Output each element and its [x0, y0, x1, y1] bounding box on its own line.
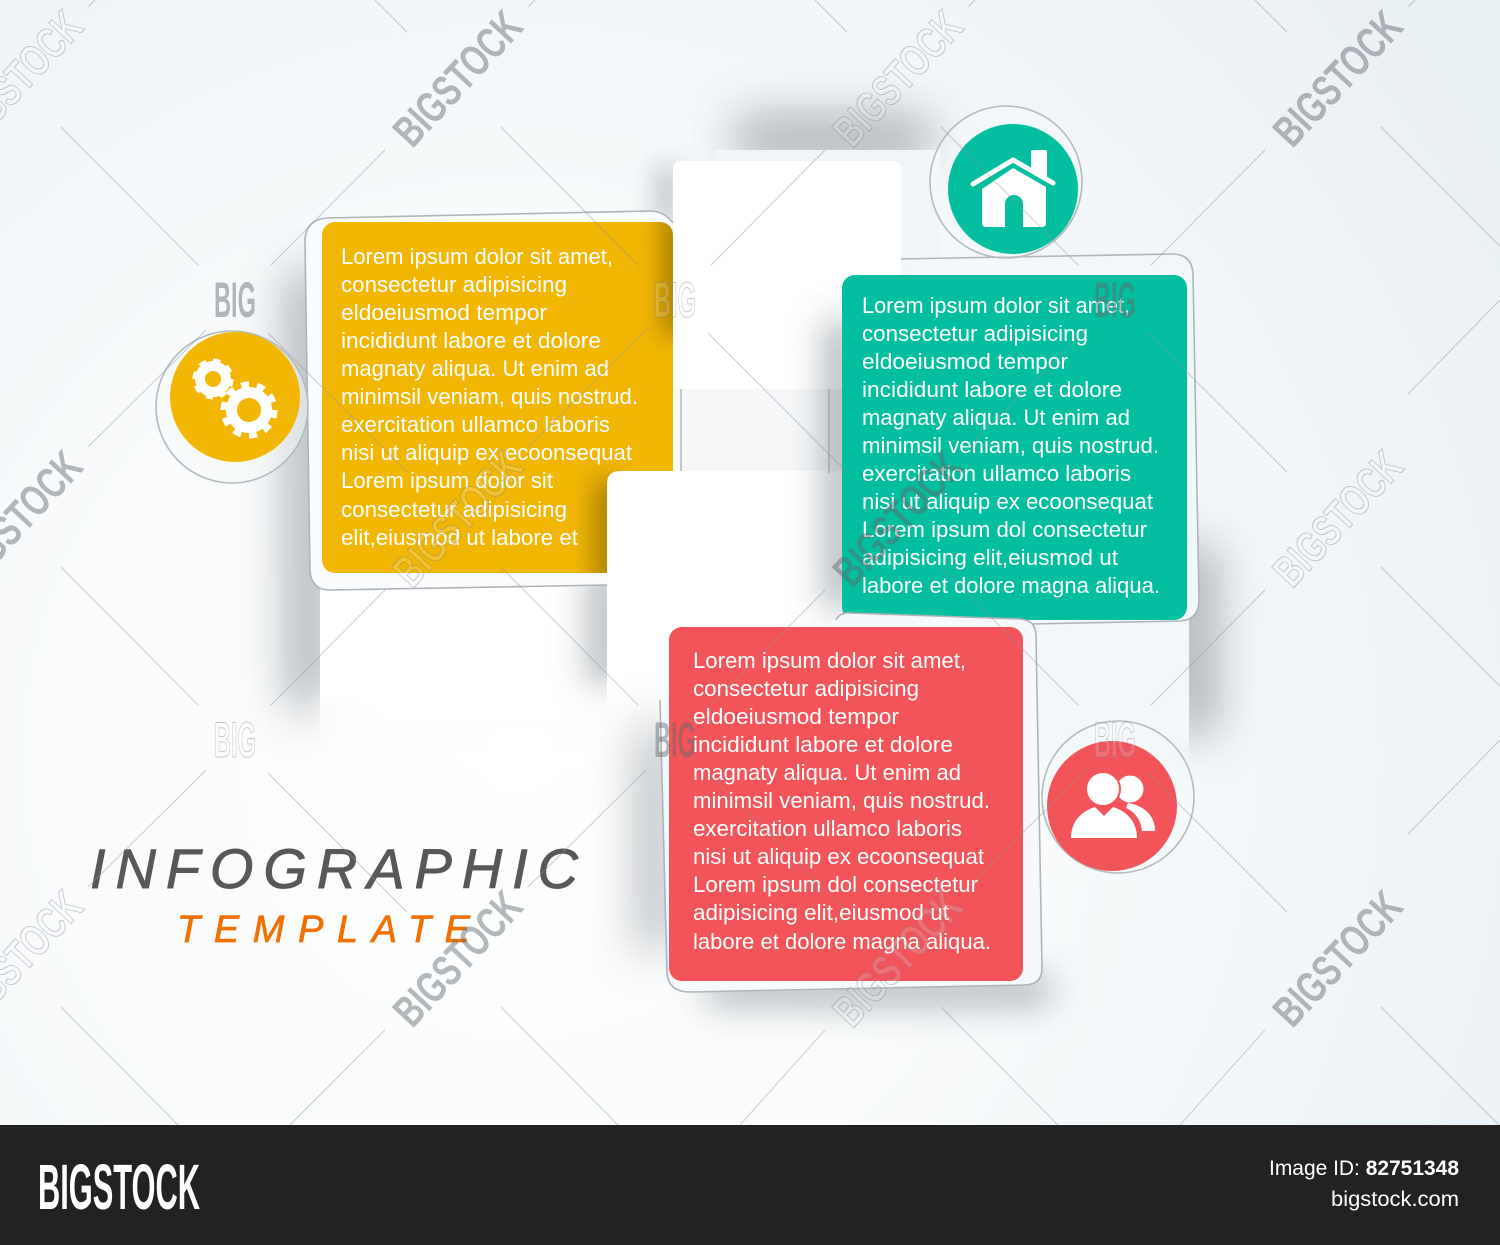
- watermarks: BIG: [214, 272, 1136, 768]
- title: [90, 837, 579, 951]
- teal card text: consectetur adipisicing: [862, 321, 1088, 346]
- white panel overlapping yellow card: [607, 471, 700, 600]
- watermarks: BIG: BIG: [654, 712, 696, 768]
- red card text: exercitation ullamco laboris: [693, 816, 962, 841]
- text: BIG: [1094, 272, 1136, 328]
- red card text: magnaty aliqua. Ut enim ad: [693, 760, 961, 785]
- watermarks: BIGSTOCK diagonal: BIGSTOCK: [384, 882, 532, 1036]
- white paper panels: [320, 150, 1189, 950]
- icon: people badge: [1042, 721, 1194, 873]
- watermarks: BIGSTOCK diagonal: [0, 2, 1412, 1036]
- watermarks: BIGSTOCK diagonal: BIGSTOCK: [824, 882, 972, 1036]
- watermarks: BIG: BIG: [214, 712, 256, 768]
- red card text: adipisicing elit,eiusmod ut: [693, 900, 949, 925]
- footer bar: BIGSTOCK: [38, 1151, 200, 1223]
- yellow card text: Lorem ipsum dolor sit amet,: [341, 244, 613, 269]
- yellow card text: Lorem ipsum dolor sit: [341, 468, 553, 493]
- teal card text: adipisicing elit,eiusmod ut: [862, 545, 1118, 570]
- yellow card outline: [305, 211, 673, 590]
- yellow card text: incididunt labore et dolore: [341, 328, 601, 353]
- icon: home badge: [930, 106, 1082, 258]
- teal card fill: [842, 275, 1187, 620]
- teal card text: minimsil veniam, quis nostrud.: [862, 433, 1159, 458]
- red card text: nisi ut aliquip ex ecoonsequat: [693, 844, 984, 869]
- panel: red text card: [660, 613, 1042, 992]
- red card text: Lorem ipsum dol consectetur: [693, 872, 978, 897]
- teal card text: Lorem ipsum dol consectetur: [862, 517, 1147, 542]
- drop shadows behind the panels: [288, 118, 1216, 1005]
- teal card outline: [901, 254, 1199, 624]
- yellow card text: consectetur adipisicing: [341, 272, 567, 297]
- yellow card text: elit,eiusmod ut labore et: [341, 525, 578, 550]
- teal card text: magnaty aliqua. Ut enim ad: [862, 405, 1130, 430]
- teal card text: nisi ut aliquip ex ecoonsequat: [862, 489, 1153, 514]
- red card text: eldoeiusmod tempor: [693, 704, 899, 729]
- watermarks: BIG: BIG: [654, 272, 696, 328]
- inner shadow on lower-left panel: [590, 565, 620, 690]
- yellow card text: exercitation ullamco laboris: [341, 412, 610, 437]
- teal card shadow: [826, 320, 856, 610]
- watermarks: BIGSTOCK diagonal: BIGSTOCK: [1264, 442, 1412, 596]
- teal card text: exercitation ullamco laboris: [862, 461, 1131, 486]
- red card text: labore et dolore magna aliqua.: [693, 929, 991, 954]
- red card outline: [660, 613, 1042, 992]
- yellow card text: minimsil veniam, quis nostrud.: [341, 384, 638, 409]
- watermarks: BIG: BIG: [214, 272, 256, 328]
- icon: gears badge: [156, 331, 308, 483]
- red card text: Lorem ipsum dolor sit amet,: [693, 648, 966, 673]
- text: BIG: [1094, 712, 1136, 768]
- shadow left of red card: [638, 725, 672, 950]
- yellow card text: [341, 244, 638, 550]
- yellow card fill: [322, 222, 673, 573]
- red card fill: [669, 627, 1023, 981]
- site url: bigstock.com: [1331, 1188, 1459, 1211]
- teal card text: [862, 293, 1160, 598]
- yellow card text: nisi ut aliquip ex ecoonsequat: [341, 440, 632, 465]
- red card text: minimsil veniam, quis nostrud.: [693, 788, 990, 813]
- watermarks: BIGSTOCK diagonal: BIGSTOCK: [1264, 882, 1412, 1036]
- red card text: [693, 648, 991, 954]
- yellow card text: consectetur adipisicing: [341, 497, 567, 522]
- panel: yellow text card: [305, 205, 700, 600]
- yellow card text: magnaty aliqua. Ut enim ad: [341, 356, 609, 381]
- teal card text: incididunt labore et dolore: [862, 377, 1122, 402]
- teal card text: labore et dolore magna aliqua.: [862, 573, 1160, 598]
- red card text: incididunt labore et dolore: [693, 732, 953, 757]
- watermarks: BIGSTOCK diagonal: BIGSTOCK: [384, 442, 532, 596]
- red card text: consectetur adipisicing: [693, 676, 919, 701]
- footer bar: [0, 1125, 1500, 1245]
- watermarks: BIGSTOCK diagonal: BIGSTOCK: [824, 442, 972, 596]
- heading: infographic: INFOGRAPHIC: [90, 837, 579, 900]
- subheading: template: TEMPLATE: [177, 909, 471, 951]
- yellow card text: eldoeiusmod tempor: [341, 300, 547, 325]
- connector strip outlines: [681, 389, 829, 473]
- teal card text: eldoeiusmod tempor: [862, 349, 1068, 374]
- image id: Image ID: 82751348: [1269, 1157, 1459, 1180]
- teal card text: Lorem ipsum dolor sit amet,: [862, 293, 1130, 318]
- panel: teal text card: [826, 254, 1199, 624]
